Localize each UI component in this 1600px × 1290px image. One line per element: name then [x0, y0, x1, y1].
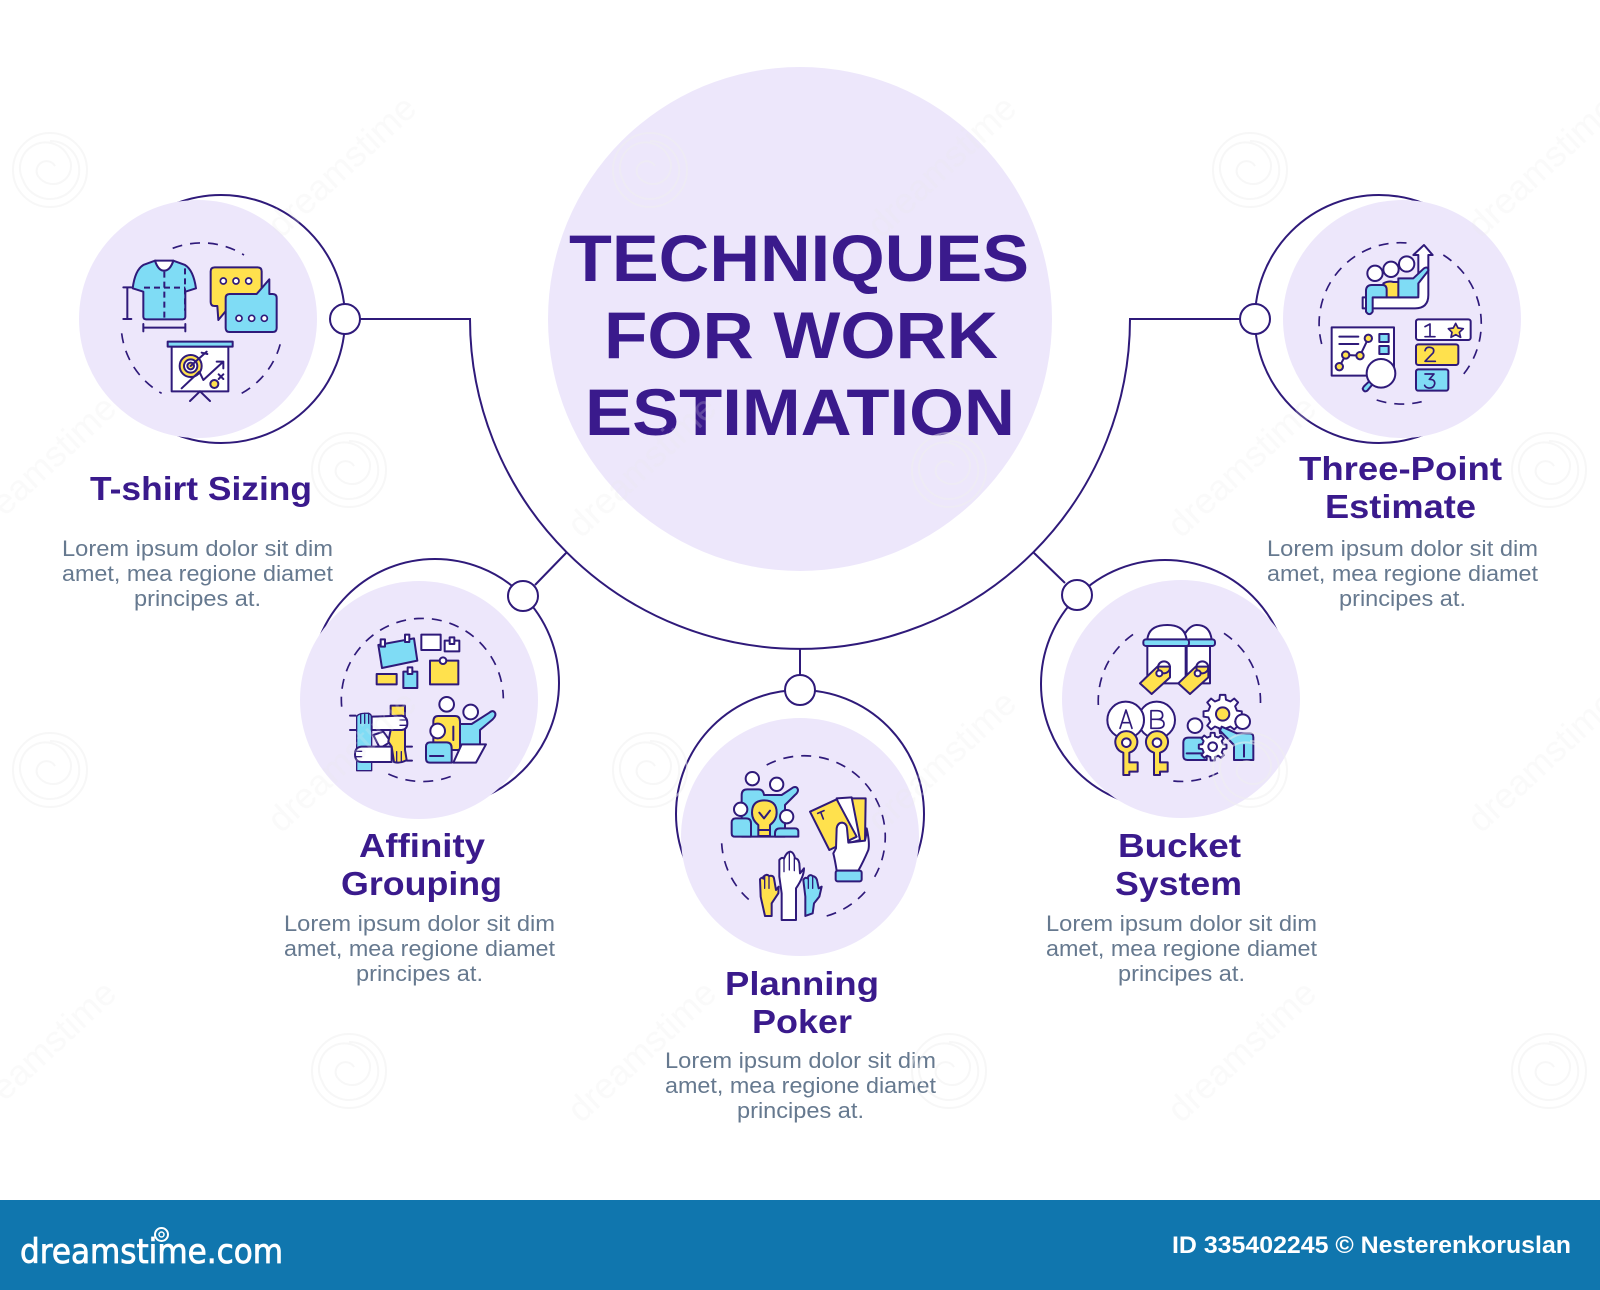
text block: Three-Point Estimate: principes at. — [1339, 586, 1466, 611]
icon group: Three-Point Estimate — [1319, 243, 1481, 404]
text block: Affinity Grouping — [284, 827, 555, 986]
watermark overlay: dreamstime — [859, 682, 1024, 840]
title — [569, 221, 1029, 449]
watermark overlay: dreamstime — [259, 87, 424, 245]
text block: Three-Point Estimate — [1267, 450, 1538, 611]
text block: Affinity Grouping: Affinity — [359, 827, 486, 864]
node: Bucket System — [1062, 580, 1092, 610]
text block: Planning Poker: Poker — [752, 1003, 852, 1040]
text block: T-shirt Sizing: principes at. — [134, 586, 261, 611]
text block: Affinity Grouping: Lorem ipsum dolor sit dim — [284, 911, 555, 936]
outline ring: Bucket System — [1041, 560, 1289, 808]
text block: Planning Poker: Planning — [725, 965, 879, 1002]
node: Planning Poker — [785, 675, 815, 705]
text block: Bucket System: Bucket — [1118, 827, 1241, 864]
text block: T-shirt Sizing: T-shirt Sizing — [90, 470, 312, 507]
outline ring: T-shirt Sizing — [97, 195, 345, 443]
text block: Affinity Grouping: amet, mea regione diamet — [284, 936, 555, 961]
text block: Affinity Grouping: Grouping — [341, 865, 502, 902]
text block: Three-Point Estimate: Lorem ipsum dolor sit dim — [1267, 536, 1538, 561]
text block: T-shirt Sizing: amet, mea regione diamet — [62, 561, 333, 586]
text block: Three-Point Estimate: Estimate — [1325, 488, 1476, 525]
disc: Three-Point Estimate — [1283, 200, 1521, 438]
disc: T-shirt Sizing — [79, 200, 317, 438]
title: TECHNIQUES — [569, 221, 1029, 295]
watermark overlay: dreamstime — [559, 387, 724, 545]
watermark overlay: dreamstime — [1159, 387, 1324, 545]
text block: Bucket System: amet, mea regione diamet — [1046, 936, 1317, 961]
icon group: T-shirt Sizing — [122, 243, 281, 401]
watermark overlay: dreamstime — [559, 972, 724, 1130]
outline ring: Three-Point Estimate — [1255, 195, 1503, 443]
node: T-shirt Sizing — [330, 304, 360, 334]
text block: T-shirt Sizing — [62, 470, 333, 611]
watermark overlay: dreamstime — [859, 87, 1024, 245]
text block: Bucket System: System — [1115, 865, 1242, 902]
footer credit: ID 335402245 © Nesterenkoruslan — [1172, 1232, 1571, 1259]
disc: Planning Poker — [681, 718, 919, 956]
text block: Affinity Grouping: principes at. — [356, 961, 483, 986]
footer band — [0, 1200, 1600, 1290]
title: ESTIMATION — [585, 375, 1015, 449]
text block: Bucket System — [1046, 827, 1317, 986]
outline ring: Affinity Grouping — [311, 559, 559, 807]
watermark overlay: dreamstime — [259, 682, 424, 840]
text block: Planning Poker: amet, mea regione diamet — [665, 1073, 936, 1098]
disc: Bucket System — [1062, 580, 1300, 818]
connector arc with branches — [360, 319, 1240, 675]
disc: Affinity Grouping — [300, 581, 538, 819]
icon group: Affinity Grouping — [341, 618, 503, 782]
icon group: Planning Poker — [722, 756, 885, 920]
title: FOR WORK — [604, 298, 998, 372]
text block: Three-Point Estimate: Three-Point — [1299, 450, 1502, 487]
text block: Bucket System: principes at. — [1118, 961, 1245, 986]
text block: Three-Point Estimate: amet, mea regione diamet — [1267, 561, 1538, 586]
text block: Planning Poker: Lorem ipsum dolor sit dim — [665, 1048, 936, 1073]
text block: T-shirt Sizing: Lorem ipsum dolor sit dim — [62, 536, 333, 561]
footer logo: dreamstime.com — [20, 1232, 283, 1272]
text block: Planning Poker — [665, 965, 936, 1123]
watermark overlay: dreamstime — [1159, 972, 1324, 1130]
outline ring: Planning Poker — [676, 690, 924, 938]
text block: Planning Poker: principes at. — [737, 1098, 864, 1123]
node: Three-Point Estimate — [1240, 304, 1270, 334]
icon group: Bucket System — [1098, 625, 1260, 781]
text block: Bucket System: Lorem ipsum dolor sit dim — [1046, 911, 1317, 936]
central title circle — [548, 67, 1052, 571]
node: Affinity Grouping — [508, 581, 538, 611]
